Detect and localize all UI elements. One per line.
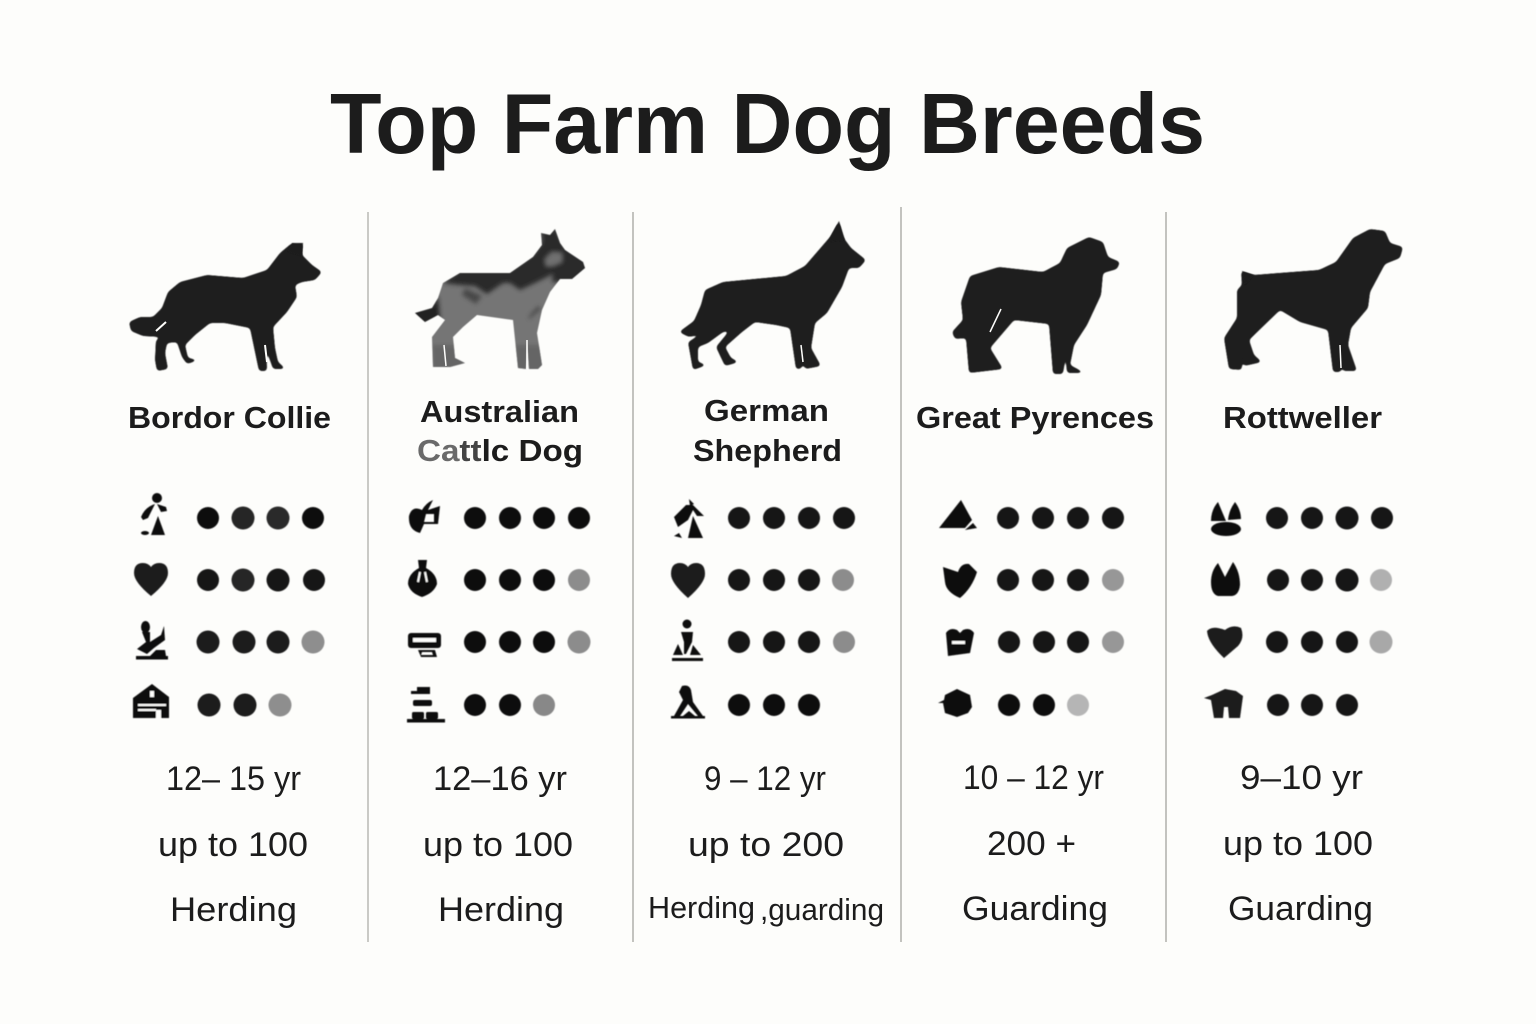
breed name: Shepherd bbox=[693, 433, 842, 468]
role: Herding bbox=[170, 891, 297, 929]
icon: hexagon blob bbox=[938, 689, 972, 717]
panel: Great Pyrenees bbox=[916, 237, 1154, 928]
role: Guarding bbox=[962, 890, 1108, 928]
rating rows bbox=[938, 500, 1124, 717]
rating rows bbox=[671, 499, 855, 718]
role: Herding bbox=[648, 890, 755, 925]
panel: German Shepherd bbox=[648, 221, 884, 927]
breed name: Rottweller bbox=[1223, 400, 1382, 435]
breed name bbox=[417, 394, 583, 468]
icon: sack bbox=[408, 560, 437, 597]
dog silhouette: Great Pyrenees bbox=[952, 237, 1120, 374]
rating: 4 dots bbox=[728, 507, 855, 529]
dog silhouette: Australian Cattle Dog bbox=[414, 228, 586, 370]
dog silhouette: Border Collie bbox=[129, 243, 322, 371]
flock size: up to 100 bbox=[158, 826, 308, 864]
icon: working figure bbox=[136, 621, 168, 660]
lifespan: 9 – 12 yr bbox=[704, 760, 826, 798]
icon: flame bbox=[409, 500, 440, 533]
breed name: Cattlc Dog bbox=[417, 433, 583, 468]
role bbox=[648, 890, 884, 927]
icon: herding figure bbox=[141, 493, 167, 535]
rating: 3 dots and 1 grey bbox=[728, 569, 854, 591]
icon: heart bbox=[134, 563, 168, 596]
role: ,guarding bbox=[760, 892, 884, 927]
rating: 3 dots and 1 grey bbox=[998, 631, 1124, 653]
icon: heart bbox=[671, 563, 705, 598]
icon: broken heart bbox=[943, 564, 977, 598]
rating: 3 dots and 1 grey bbox=[196, 630, 324, 654]
icon: wedge bbox=[939, 500, 977, 530]
icon: barn bbox=[133, 684, 169, 718]
breed name: Bordor Collie bbox=[128, 400, 331, 435]
role: Herding bbox=[438, 891, 564, 929]
icon: feeder bbox=[408, 633, 441, 657]
rating: 4 dots bbox=[1266, 506, 1393, 530]
icon: stacked blocks bbox=[407, 687, 445, 722]
rating: 4 dots bbox=[197, 506, 324, 530]
icon: working figure bbox=[672, 620, 703, 661]
panel: Border Collie bbox=[128, 243, 331, 929]
panel: Rottweiler bbox=[1204, 229, 1403, 928]
lifespan: 12–16 yr bbox=[433, 760, 567, 798]
rating: 3 dots and 1 grey bbox=[1267, 568, 1392, 592]
rating: 4 dots bbox=[997, 507, 1124, 529]
flock size: up to 100 bbox=[423, 826, 573, 864]
icon: paw bbox=[1211, 502, 1241, 536]
icon: figure with tool bbox=[671, 686, 705, 718]
flock size: up to 100 bbox=[1223, 825, 1373, 863]
rating: 4 dots bbox=[197, 568, 325, 592]
breed name: Australian bbox=[420, 394, 579, 429]
icon: heart bbox=[1207, 626, 1242, 658]
rating: 3 dots and 1 grey bbox=[464, 569, 590, 591]
lifespan: 10 – 12 yr bbox=[963, 759, 1104, 797]
rating: 3 dots bbox=[728, 694, 820, 716]
rating: 2 dots and 1 grey bbox=[198, 694, 292, 716]
icon: collar badge bbox=[946, 629, 974, 656]
rating: 4 dots bbox=[464, 507, 590, 529]
lifespan: 9–10 yr bbox=[1240, 759, 1363, 797]
rating: 3 dots and 1 grey bbox=[728, 631, 855, 653]
rating: 3 dots and 1 grey bbox=[464, 630, 590, 654]
lifespan: 12– 15 yr bbox=[166, 760, 301, 798]
rating rows bbox=[133, 493, 325, 718]
dog silhouette: German Shepherd bbox=[679, 221, 866, 370]
breed name: Great Pyrences bbox=[916, 400, 1154, 435]
dog silhouette: Rottweiler bbox=[1224, 229, 1403, 372]
rating rows bbox=[407, 500, 590, 722]
rating: 2 dots and 1 grey bbox=[464, 694, 555, 716]
icon: herding figure bbox=[674, 499, 704, 538]
breed name bbox=[693, 393, 842, 468]
panel: Australian Cattle Dog bbox=[407, 225, 590, 929]
breed name: German bbox=[704, 393, 829, 428]
rating: 2 dots and 1 grey bbox=[998, 694, 1089, 716]
icon: torso shape bbox=[1204, 689, 1243, 718]
rating: 3 dots and 1 grey bbox=[997, 569, 1124, 591]
role: Guarding bbox=[1228, 890, 1373, 928]
rating: 3 dots bbox=[1267, 694, 1358, 716]
flock size: 200 + bbox=[987, 825, 1076, 863]
rating: 3 dots and 1 grey bbox=[1266, 630, 1392, 654]
title: Top Farm Dog Breeds bbox=[330, 77, 1205, 172]
rating rows bbox=[1204, 502, 1393, 718]
flock size: up to 200 bbox=[688, 826, 844, 864]
icon: tooth bbox=[1211, 562, 1240, 596]
